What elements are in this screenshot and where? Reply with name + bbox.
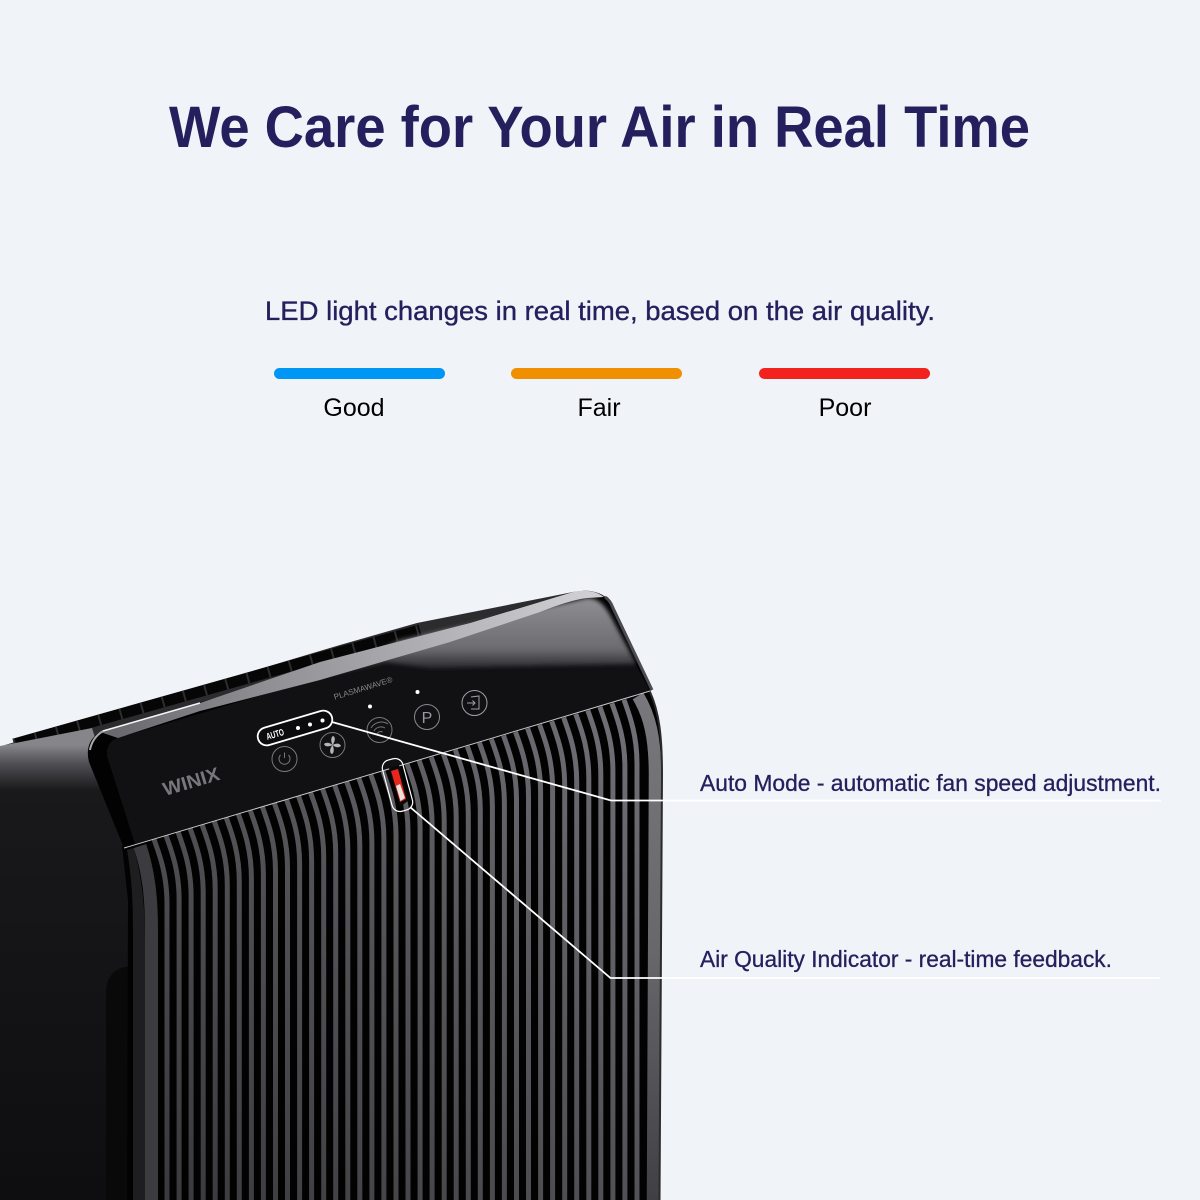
icon: fan button [320, 732, 345, 758]
panel right edge [605, 597, 652, 690]
title: We Care for Your Air in Real Time [169, 95, 1030, 160]
callout text: air quality indicator: Air Quality Indicator - real-time feedback. [700, 946, 1112, 972]
auto mode pill: AUTO [265, 727, 285, 743]
panel bottom line [124, 691, 650, 848]
legend item: poor [759, 368, 930, 422]
legend item: poor: Poor [819, 394, 871, 422]
icon: exit button [462, 690, 487, 716]
panel white highlight [103, 703, 200, 731]
legend item: fair [511, 368, 682, 422]
callout text: auto mode: Auto Mode - automatic fan speed adjustment. [700, 770, 1161, 796]
LED red light [391, 769, 406, 802]
panel light band [100, 591, 604, 738]
air quality LED [380, 757, 415, 813]
front grille base [122, 690, 662, 1200]
control panel [88, 591, 652, 848]
auto mode pill [256, 708, 334, 748]
icon: power button [272, 746, 297, 772]
LED housing [389, 765, 409, 807]
icon: P button: P [422, 710, 432, 727]
callout: auto mode [332, 722, 1161, 800]
legend item: fair: Fair [577, 394, 621, 422]
LED outline [380, 757, 415, 813]
right edge line [650, 692, 662, 1200]
icon: P button [414, 704, 440, 730]
PLASMAWAVE logo: PLASMAWAVE® [333, 675, 394, 702]
panel bezel [88, 591, 652, 848]
left front band [127, 848, 145, 1200]
legend: air quality colours [274, 368, 930, 422]
WINIX logo: WINIX [161, 764, 223, 801]
air purifier product [0, 591, 662, 1200]
side body [0, 728, 135, 1200]
panel gloss reflection [330, 598, 636, 676]
body side recess [106, 966, 134, 1200]
LED glare [396, 784, 405, 801]
panel white edge [90, 731, 103, 750]
leader line: auto mode [332, 722, 1161, 800]
leader line: air quality indicator [410, 807, 1160, 978]
icon: wifi button [367, 718, 392, 742]
right front edge band [638, 696, 655, 1200]
indicator dots [368, 690, 420, 708]
subtitle: LED light changes in real time, based on the air quality. [265, 296, 935, 326]
top vent [5, 592, 585, 745]
legend item: good [274, 368, 445, 422]
legend item: good: Good [323, 394, 385, 422]
grille fins [154, 700, 637, 1200]
callout: air quality indicator [410, 807, 1160, 978]
left front edge highlight [140, 846, 152, 1200]
panel face [107, 598, 650, 844]
